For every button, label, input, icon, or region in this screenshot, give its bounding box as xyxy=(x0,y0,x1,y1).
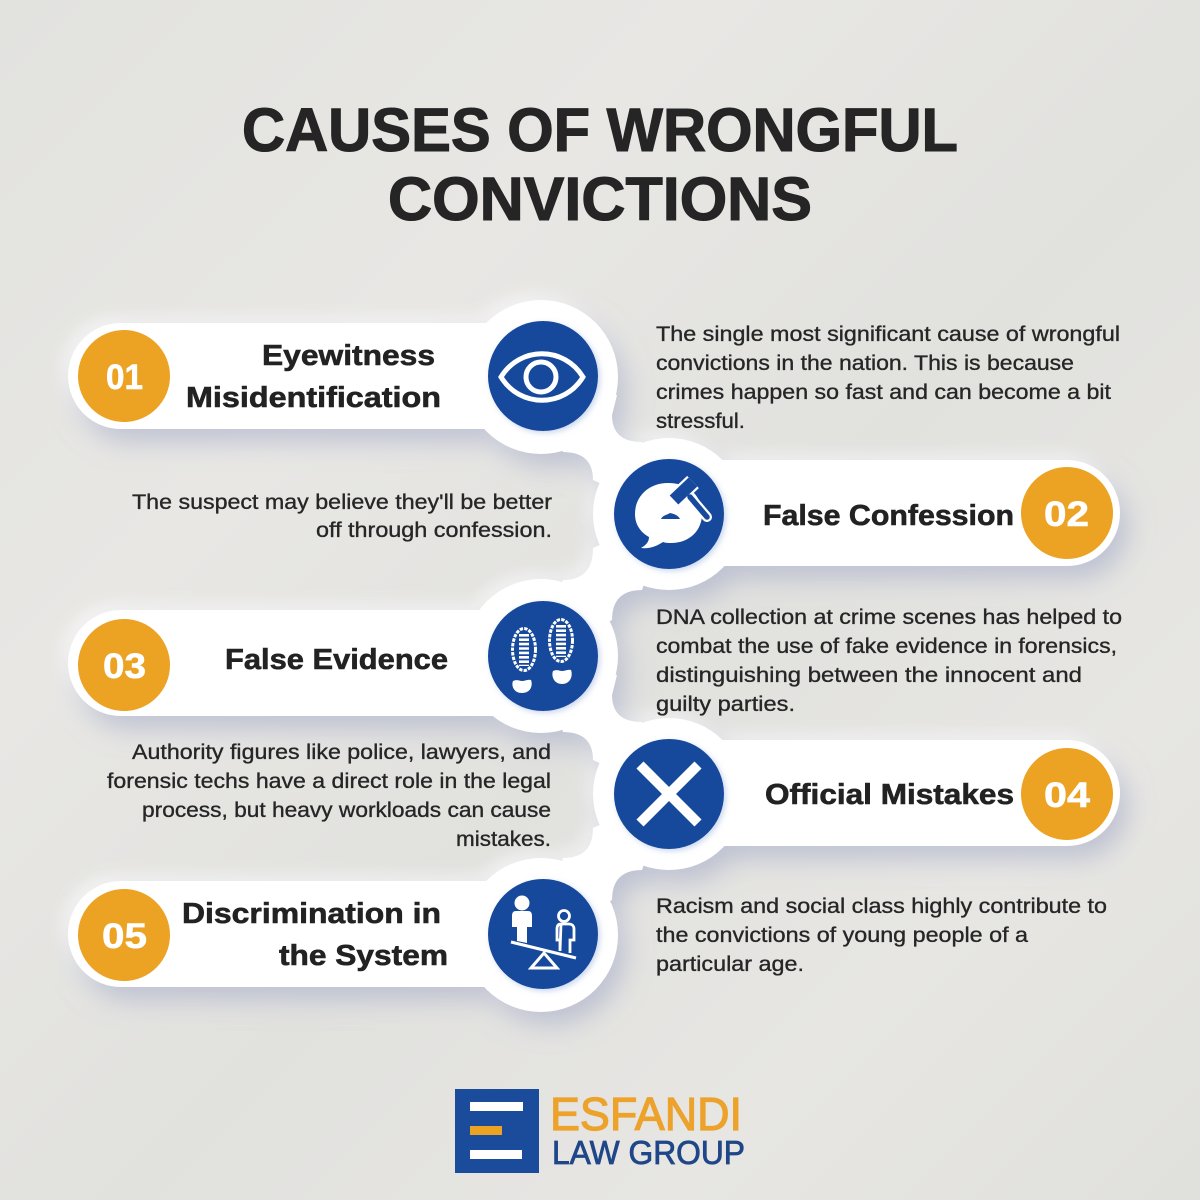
heading: eyewitness misidentification xyxy=(186,340,441,414)
panel: 02 false confession xyxy=(132,459,1113,569)
heading: discrimination in the system xyxy=(182,898,448,972)
logo wordmark: ESFANDI xyxy=(550,1088,742,1140)
icon: cross xyxy=(614,739,724,849)
heading: eyewitness misidentification: Eyewitness xyxy=(262,340,435,372)
description 01: crimes happen so fast and can become a bit xyxy=(656,380,1111,404)
number badge 04 xyxy=(1021,748,1113,840)
heading: false evidence: False Evidence xyxy=(225,644,448,676)
description 01 xyxy=(656,322,1120,433)
icon: scale with two people xyxy=(488,879,598,989)
description 04: mistakes. xyxy=(456,827,551,851)
logo: Esfandi Law Group xyxy=(455,1088,745,1173)
heading: official mistakes: Official Mistakes xyxy=(765,779,1014,811)
heading: eyewitness misidentification: Misidentification xyxy=(186,382,441,414)
description 03: combat the use of fake evidence in forensics, xyxy=(656,634,1117,658)
heading: discrimination in the system: Discrimination in xyxy=(182,898,441,930)
description 03: DNA collection at crime scenes has helped to xyxy=(656,605,1122,629)
number badge 05: 05 xyxy=(102,917,147,956)
description 03: guilty parties. xyxy=(656,692,795,716)
description 04: process, but heavy workloads can cause xyxy=(142,798,551,822)
number badge 03: 03 xyxy=(103,647,146,686)
number badge 01: 01 xyxy=(106,358,143,397)
title xyxy=(242,96,958,233)
panel: 01 eyewitness misidentification xyxy=(78,321,1120,433)
panel: 03 false evidence xyxy=(78,601,1122,716)
description 02: The suspect may believe they'll be better xyxy=(132,490,552,514)
number badge 03 xyxy=(78,619,170,711)
description 03: distinguishing between the innocent and xyxy=(656,663,1082,687)
connected ribbon of pills and circles xyxy=(68,300,1120,1012)
logo wordmark xyxy=(550,1088,745,1171)
number badge 01 xyxy=(78,330,170,422)
number badge 02: 02 xyxy=(1044,495,1089,534)
description 01: convictions in the nation. This is because xyxy=(656,351,1074,375)
description 03 xyxy=(656,605,1122,716)
description 04: forensic techs have a direct role in the legal xyxy=(107,769,551,793)
logo wordmark: LAW GROUP xyxy=(552,1134,745,1171)
number badge 05 xyxy=(78,889,170,981)
number badge 04: 04 xyxy=(1044,776,1091,815)
description 05: particular age. xyxy=(656,952,804,976)
description 05: the convictions of young people of a xyxy=(656,923,1028,947)
description 05 xyxy=(656,894,1107,976)
logo mark xyxy=(455,1089,539,1173)
description 02 xyxy=(132,490,552,542)
icon: speech bubble with gavel xyxy=(614,459,724,569)
panel: 04 official mistakes xyxy=(107,739,1113,851)
description 04 xyxy=(107,740,551,851)
heading: discrimination in the system: the System xyxy=(279,940,448,972)
heading: false confession: False Confession xyxy=(763,500,1014,532)
icon: footprints xyxy=(488,601,598,711)
title: CONVICTIONS xyxy=(388,165,812,233)
panel: 05 discrimination in the system xyxy=(78,879,1107,989)
icon: eye xyxy=(488,321,598,431)
description 02: off through confession. xyxy=(316,518,552,542)
description 04: Authority figures like police, lawyers, and xyxy=(132,740,551,764)
description 05: Racism and social class highly contribute to xyxy=(656,894,1107,918)
description 01: stressful. xyxy=(656,409,745,433)
description 01: The single most significant cause of wrongful xyxy=(656,322,1120,346)
title: CAUSES OF WRONGFUL xyxy=(242,96,958,164)
number badge 02 xyxy=(1021,467,1113,559)
